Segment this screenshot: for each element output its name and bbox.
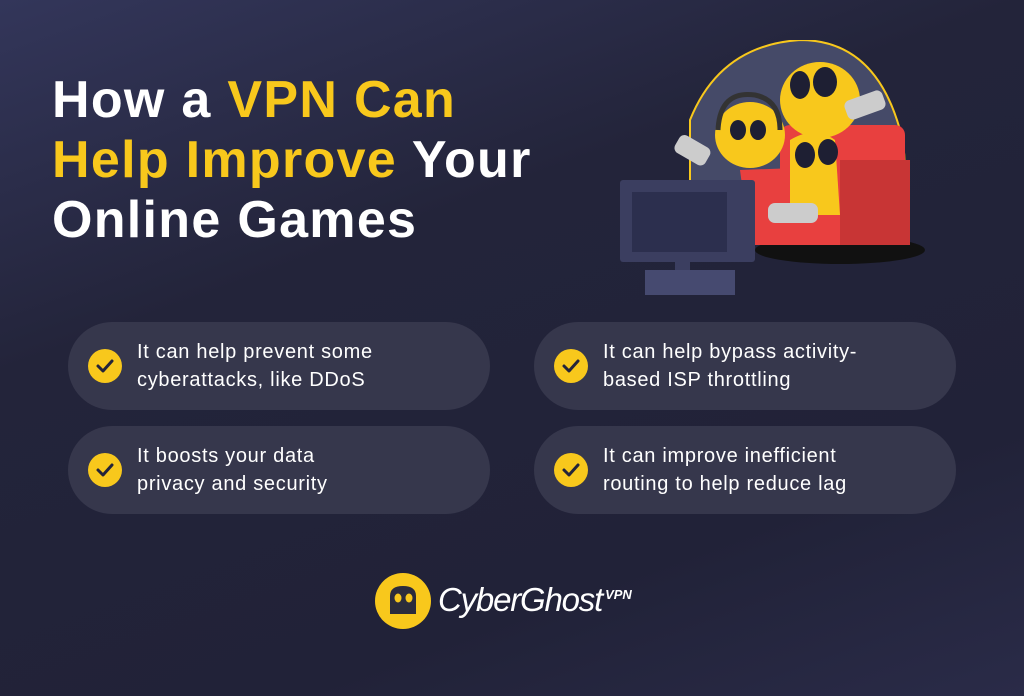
logo <box>375 573 632 629</box>
logo: CyberGhostVPN <box>438 581 632 618</box>
title: Online Games <box>52 191 417 249</box>
card: cyberattacks: cyberattacks, like DDoS <box>137 369 365 391</box>
title <box>52 71 532 249</box>
card: throttling: It can help bypass activity- <box>603 341 857 363</box>
card: routing: It can improve inefficient <box>603 445 836 467</box>
card: throttling: based ISP throttling <box>603 369 791 391</box>
card: throttling <box>534 322 956 410</box>
icon: check <box>554 453 588 487</box>
icon: check <box>88 349 122 383</box>
illustration: gamers on couch <box>620 40 925 295</box>
title: How a VPN Can <box>52 71 456 129</box>
icon: check <box>554 349 588 383</box>
card: privacy <box>68 426 490 514</box>
card: privacy: It boosts your data <box>137 445 315 467</box>
card: cyberattacks: It can help prevent some <box>137 341 373 363</box>
card: cyberattacks <box>68 322 490 410</box>
card: routing <box>534 426 956 514</box>
card: privacy: privacy and security <box>137 473 328 495</box>
icon: ghost logo <box>375 573 431 629</box>
icon: check <box>88 453 122 487</box>
title: Help Improve Your <box>52 131 532 189</box>
card: routing: routing to help reduce lag <box>603 473 847 495</box>
